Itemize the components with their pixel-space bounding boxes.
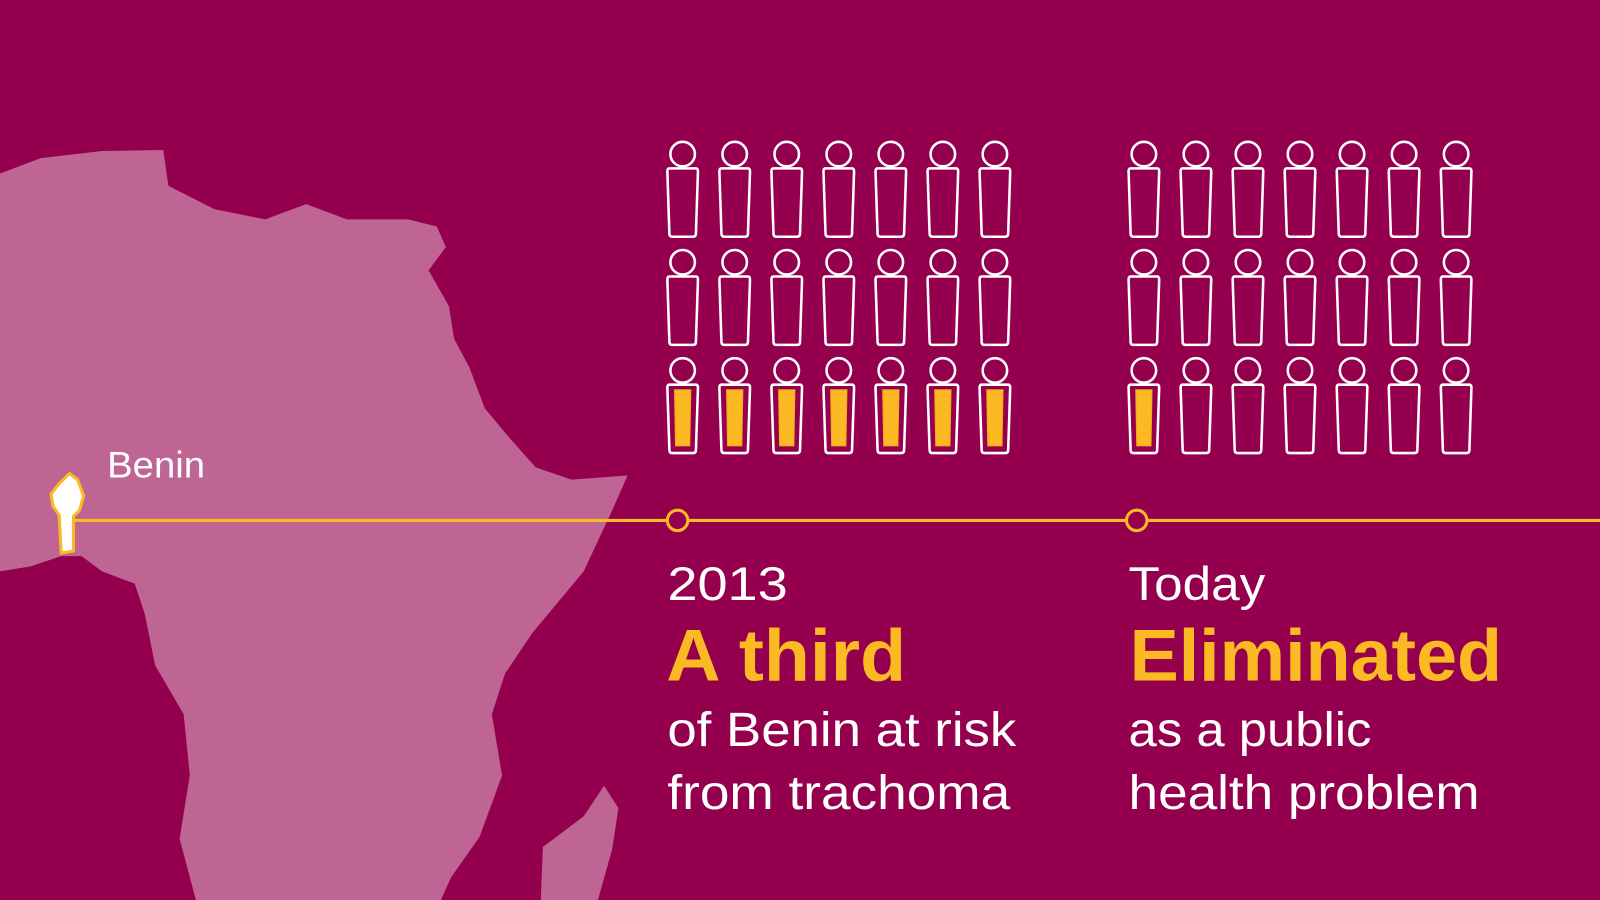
pictogram: 2013 [667, 142, 1010, 453]
map: Africa [0, 150, 628, 900]
text block: today: as a public [1129, 704, 1371, 757]
text block: 2013: from trachoma [667, 767, 1011, 820]
label: Benin: Benin [107, 445, 205, 486]
text block: 2013: 2013 [667, 558, 788, 610]
text block: today [1129, 558, 1502, 820]
text block: today: Eliminated [1130, 614, 1502, 697]
icon: Benin outline [51, 473, 84, 553]
text block: today: health problem [1129, 767, 1480, 820]
pictogram: today [1129, 142, 1471, 453]
text block: today: Today [1129, 558, 1266, 610]
text block: 2013: of Benin at risk [667, 704, 1017, 757]
timeline [71, 510, 1600, 531]
text block: 2013: A third [666, 614, 906, 697]
text block: 2013 [666, 558, 1017, 820]
